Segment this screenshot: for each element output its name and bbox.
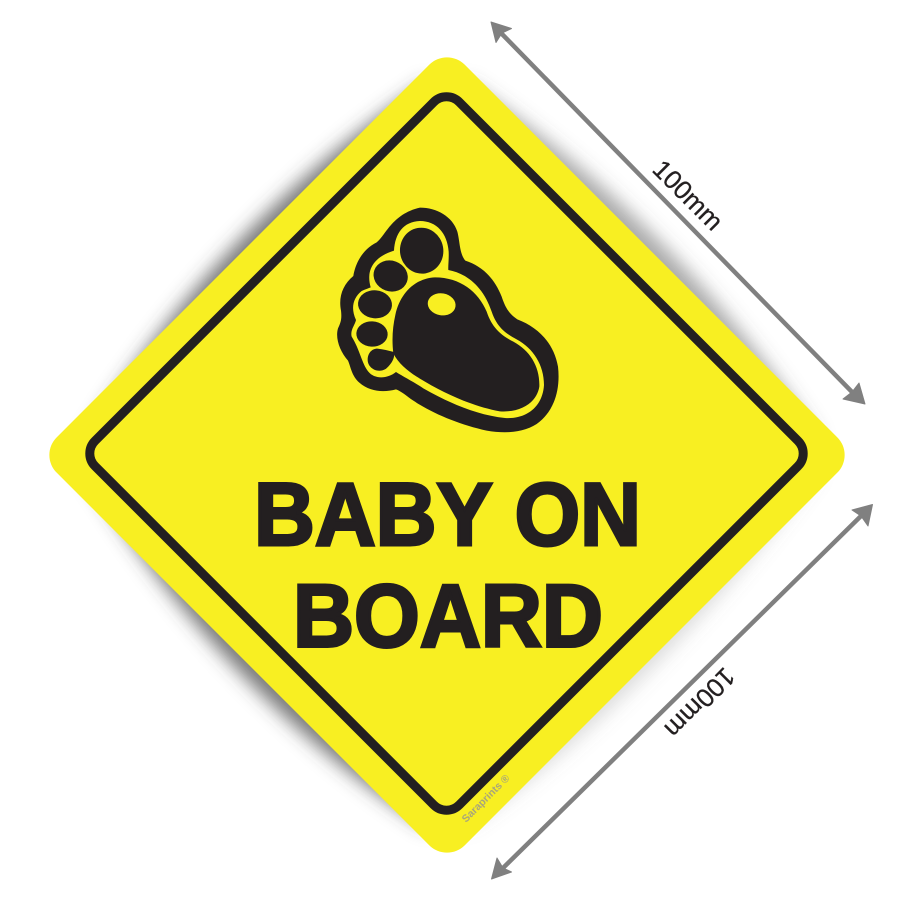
sole: [393, 277, 539, 411]
foot yellow outline: [351, 221, 544, 418]
second toe: [369, 256, 412, 296]
sole highlight: [426, 291, 457, 318]
big toe: [396, 224, 447, 277]
dimension label: top: 100mm: [647, 154, 729, 236]
third toe: [357, 289, 393, 320]
brand label: Saraprints ®: [460, 772, 513, 825]
dimension label: bottom: 100mm: [659, 662, 741, 744]
fourth toe: [356, 321, 388, 347]
arrow: top right dimension: [491, 22, 865, 404]
little toe: [368, 349, 394, 371]
heading: BOARD: BOARD: [293, 566, 603, 666]
black inner border: [82, 89, 811, 818]
foot outer silhouette: [337, 208, 559, 432]
heading: BABY ON: BABY ON: [254, 464, 641, 564]
icon: baby foot: [337, 208, 559, 432]
sign shadow: [75, 80, 820, 830]
arrow: bottom right dimension: [492, 504, 872, 879]
